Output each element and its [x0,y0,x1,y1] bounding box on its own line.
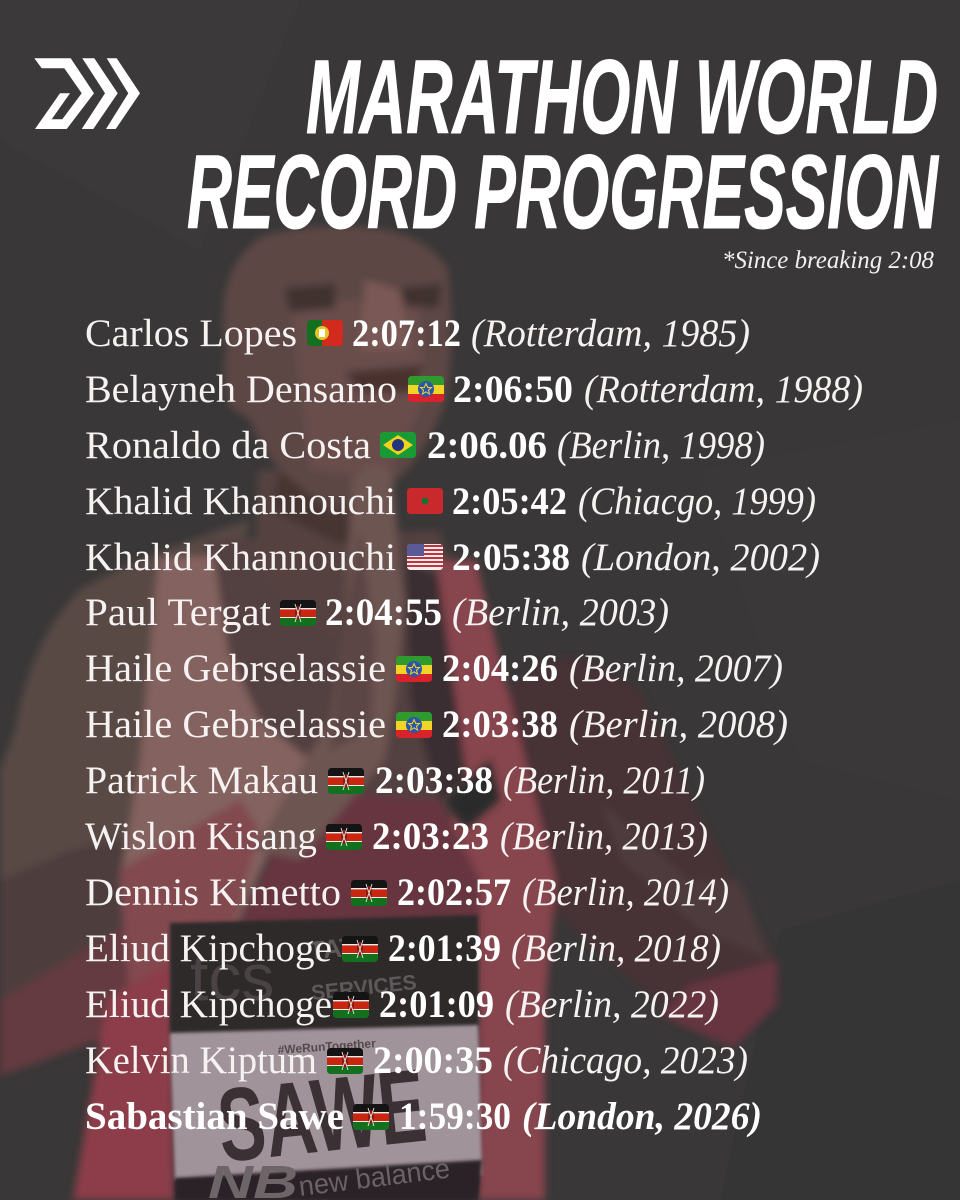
title [187,39,939,251]
photo: singlet left [73,556,310,1200]
row: Sabastian Sawe (highlighted): (London, 2026) [522,1095,762,1138]
row: Kelvin Kiptum: (Chicago, 2023) [503,1039,748,1082]
row: Ronaldo da Costa: Ronaldo da Costa [85,424,371,467]
row: Eliud Kipchoge 2018 [85,927,721,970]
row: Haile Gebrselassie 2008: 2:03:38 [442,703,558,746]
row: Eliud Kipchoge 2022: (Berlin, 2022) [505,983,719,1026]
row: Wislon Kisang [85,815,708,858]
row: Carlos Lopes: (Rotterdam, 1985) [471,312,750,355]
row: Khalid Khannouchi (USA) [86,542,819,578]
row: Dennis Kimetto [85,871,729,914]
row: Khalid Khannouchi (Morocco): (Chiacgo, 1999) [578,480,816,523]
photo: head [223,226,452,545]
logo [34,58,140,129]
photo: race bib [170,915,482,1200]
photo: left shoulder and arm [0,520,250,1076]
row: Wislon Kisang: (Berlin, 2013) [500,815,708,858]
bib: bottom logo band [175,1153,482,1200]
record list [85,312,863,1138]
row: Haile Gebrselassie 2008: (Berlin, 2008) [569,703,788,746]
photo: hands [255,462,405,860]
row: Sabastian Sawe (highlighted): 1:59:30 [399,1095,511,1138]
row: Belayneh Densamo: Belayneh Densamo [85,368,397,411]
row: Wislon Kisang: 2:03:23 [372,815,489,858]
row: Wislon Kisang: Wislon Kisang [85,815,317,858]
row: Patrick Makau: (Berlin, 2011) [503,759,705,802]
row: Ronaldo da Costa [86,430,764,466]
row: Khalid Khannouchi (Morocco): 2:05:42 [452,480,567,523]
row: Sabastian Sawe (highlighted) [85,1095,762,1138]
row: Eliud Kipchoge 2018: Eliud Kipchoge [85,927,332,970]
row: Haile Gebrselassie 2007: Haile Gebrselassie [85,647,386,690]
bib: white panel [170,1025,482,1185]
row: Khalid Khannouchi (Morocco) [86,486,815,522]
row: Khalid Khannouchi (USA): Khalid Khannouchi [85,536,396,579]
row: Eliud Kipchoge 2018: 2:01:39 [388,927,501,970]
row: Eliud Kipchoge 2022: Eliud Kipchoge [85,983,332,1026]
bib: dark sponsor panel: tcs [190,940,274,1014]
row: Belayneh Densamo: 2:06:50 [453,368,573,411]
row: Carlos Lopes [86,318,749,354]
photo: right arm [500,658,778,1048]
row: Ronaldo da Costa: (Berlin, 1998) [557,424,765,467]
row: Ronaldo da Costa: 2:06.06 [427,424,547,467]
row: Khalid Khannouchi (Morocco): Khalid Khannouchi [85,480,396,523]
row: Paul Tergat: Paul Tergat [85,591,271,634]
bib: dark sponsor panel: SERVICES [310,971,418,1005]
row: Paul Tergat: 2:04:55 [325,591,442,634]
row: Dennis Kimetto: 2:02:57 [397,871,511,914]
row: Haile Gebrselassie 2008 [85,703,788,746]
row: Dennis Kimetto: Dennis Kimetto [85,871,341,914]
bib: white panel: #WeRunTogether [277,1036,377,1057]
row: Khalid Khannouchi (USA): (London, 2002) [581,536,820,579]
row: Carlos Lopes: 2:07:12 [352,312,461,355]
photo: chest [200,470,500,900]
row: Eliud Kipchoge 2022 [85,983,719,1026]
subtitle note: *Since breaking 2:08 [722,247,934,274]
row: Patrick Makau [85,759,705,802]
row: Patrick Makau: Patrick Makau [85,759,318,802]
row: Dennis Kimetto: (Berlin, 2014) [522,871,729,914]
row: Patrick Makau: 2:03:38 [375,759,493,802]
row: Belayneh Densamo: (Rotterdam, 1988) [584,368,863,411]
row: Haile Gebrselassie 2007: (Berlin, 2007) [569,647,783,690]
row: Khalid Khannouchi (USA): 2:05:38 [452,536,570,579]
photo: runner [0,226,778,1200]
bib: dark sponsor panel: TATA [307,929,374,966]
row: Haile Gebrselassie 2008: Haile Gebrselassie [85,703,386,746]
row: Carlos Lopes: Carlos Lopes [85,312,297,355]
row: Haile Gebrselassie 2007: 2:04:26 [442,647,558,690]
row: Eliud Kipchoge 2018: (Berlin, 2018) [511,927,721,970]
row: Belayneh Densamo [85,368,863,411]
row: Sabastian Sawe (highlighted): Sabastian Sawe [85,1095,344,1138]
row: Kelvin Kiptum: Kelvin Kiptum [85,1039,317,1082]
bib: white panel: SAWE [212,1048,431,1185]
row: Kelvin Kiptum: 2:00:35 [373,1039,493,1082]
row: Haile Gebrselassie 2007 [85,647,783,690]
row: Kelvin Kiptum [85,1039,748,1082]
photo: watch [445,760,500,830]
bib: dark sponsor panel [170,915,478,1035]
row: Eliud Kipchoge 2022: 2:01:09 [379,983,494,1026]
row: Paul Tergat: (Berlin, 2003) [452,591,669,634]
photo: singlet right [230,560,556,1200]
row: Paul Tergat [85,591,669,634]
